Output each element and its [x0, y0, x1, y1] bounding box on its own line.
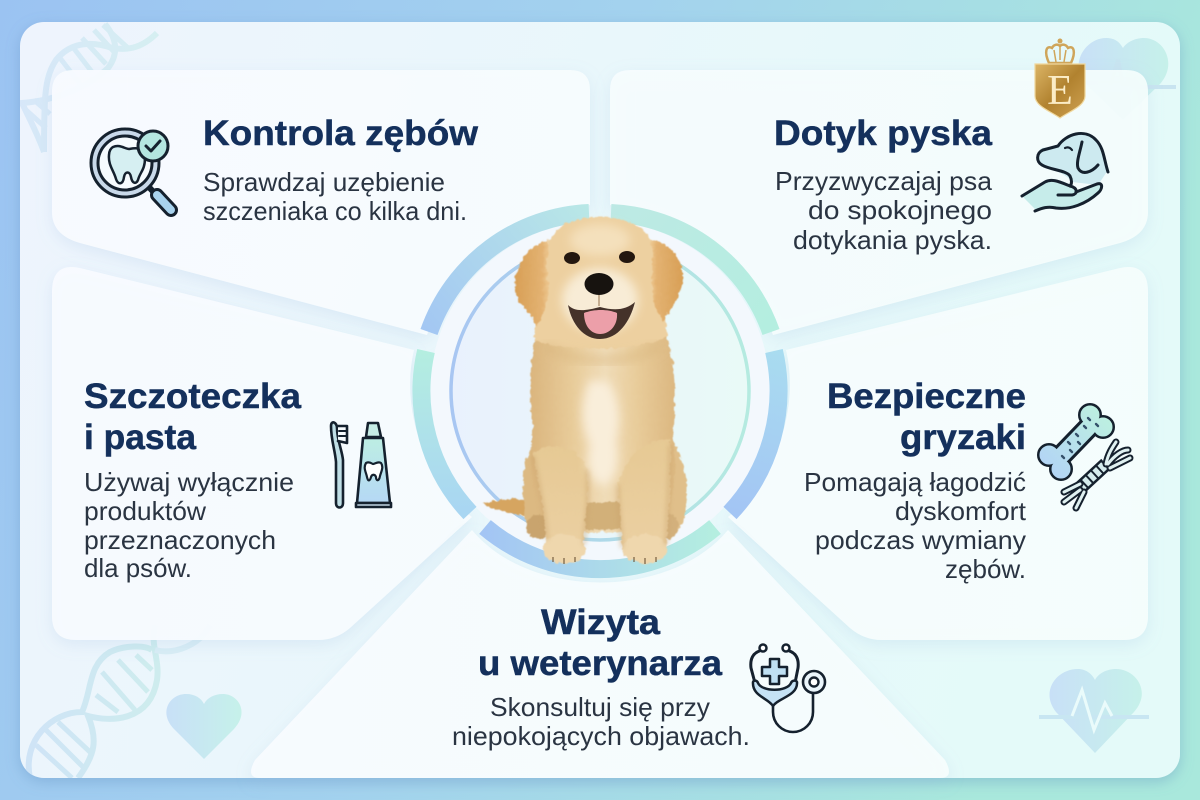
- nose: [584, 273, 614, 295]
- ears: [515, 240, 683, 326]
- panel: top right: [610, 70, 1148, 335]
- text: Kontrola zębów body: Sprawdzaj uzębienie: [203, 167, 445, 197]
- puppy fur: [483, 217, 687, 564]
- text: Bezpieczne gryzaki body: dyskomfort: [895, 496, 1027, 526]
- rope: [1080, 464, 1106, 488]
- eyes: [564, 252, 580, 264]
- outer ring segments: [421, 213, 779, 569]
- bone outline: [1040, 406, 1112, 478]
- heading: Dotyk pyska: Dotyk pyska: [774, 114, 993, 153]
- forehead highlight: [570, 224, 630, 256]
- decoration: DNA bottom left: [26, 640, 202, 778]
- text: Wizyta body: Skonsultuj się przy: [490, 692, 710, 722]
- text: Szczoteczka body: Używaj wyłącznie: [84, 467, 294, 497]
- tongue: [584, 310, 617, 334]
- back paws: [526, 515, 550, 539]
- icon: bone and rope toy: [1040, 406, 1130, 508]
- text: Szczoteczka body: produktów: [84, 496, 206, 526]
- muzzle: [562, 268, 638, 332]
- icon: dog head and hand: [1022, 133, 1108, 211]
- chest highlight: [582, 380, 619, 486]
- text: Bezpieczne gryzaki body: Pomagają łagodzić: [804, 467, 1026, 497]
- text: Dotyk pyska body: dotykania pyska.: [793, 225, 992, 255]
- panel: bottom: [251, 530, 949, 778]
- decoration: heart with pulse bottom right: [1039, 669, 1149, 753]
- front leg left: [533, 447, 587, 548]
- text: Wizyta body: niepokojących objawach.: [452, 721, 750, 751]
- leg shading: [533, 445, 670, 548]
- inner disc: [451, 242, 749, 540]
- text: Wizyta body: [452, 692, 750, 751]
- central ring: [421, 213, 779, 569]
- heading: Szczoteczka i pasta: Szczoteczka: [84, 377, 302, 416]
- belly shadow: [585, 502, 624, 530]
- front leg right: [618, 439, 671, 550]
- text: Szczoteczka body: przeznaczonych: [84, 525, 276, 555]
- heading: Bezpieczne gryzaki: [827, 377, 1026, 457]
- icon: toothbrush and toothpaste: [331, 422, 391, 508]
- text: Kontrola zębów body: [203, 167, 467, 226]
- decoration: plain heart bottom left: [166, 694, 242, 759]
- logo: gold shield with crown: [1035, 38, 1085, 118]
- text: Szczoteczka body: [84, 467, 294, 583]
- heading: Bezpieczne gryzaki: Bezpieczne: [827, 377, 1026, 416]
- heading: Wizyta u weterynarza: Wizyta: [541, 603, 661, 642]
- panel: top left: [52, 70, 590, 335]
- mouth: [568, 302, 635, 339]
- heading: Bezpieczne gryzaki: gryzaki: [900, 418, 1026, 457]
- icon: stethoscope: [751, 644, 825, 732]
- text: Dotyk pyska body: do spokojnego: [808, 195, 992, 225]
- text: Bezpieczne gryzaki body: [804, 467, 1027, 584]
- bone fill: [1040, 406, 1112, 478]
- panel: left middle: [52, 267, 472, 640]
- text: Bezpieczne gryzaki body: podczas wymiany: [815, 525, 1026, 555]
- text: Dotyk pyska body: [775, 166, 993, 255]
- text: Bezpieczne gryzaki body: zębów.: [945, 554, 1026, 584]
- decoration: heart with pulse top right: [1079, 38, 1176, 120]
- decoration: DNA top left: [22, 24, 157, 152]
- front paws: [542, 534, 586, 564]
- puppy: [483, 217, 687, 564]
- logo: gold shield with crown: E: [1047, 68, 1073, 114]
- heading: Szczoteczka i pasta: i pasta: [84, 418, 197, 457]
- haunches: [523, 450, 552, 530]
- paw toes: [553, 557, 656, 564]
- body: [530, 333, 675, 532]
- head: [534, 217, 668, 349]
- heading: Wizyta u weterynarza: [478, 603, 723, 683]
- icon: magnifier with tooth: [91, 129, 171, 210]
- neck shading: [545, 345, 660, 360]
- tail: [483, 499, 534, 518]
- heading: Wizyta u weterynarza: u weterynarza: [478, 644, 723, 683]
- heading: Kontrola zębów: Kontrola zębów: [203, 114, 479, 153]
- panel: right middle: [728, 267, 1148, 640]
- text: Dotyk pyska body: Przyzwyczajaj psa: [775, 166, 993, 196]
- heading: Szczoteczka i pasta: [84, 377, 302, 457]
- text: Szczoteczka body: dla psów.: [84, 553, 192, 583]
- text: Kontrola zębów body: szczeniaka co kilka dni.: [203, 196, 467, 226]
